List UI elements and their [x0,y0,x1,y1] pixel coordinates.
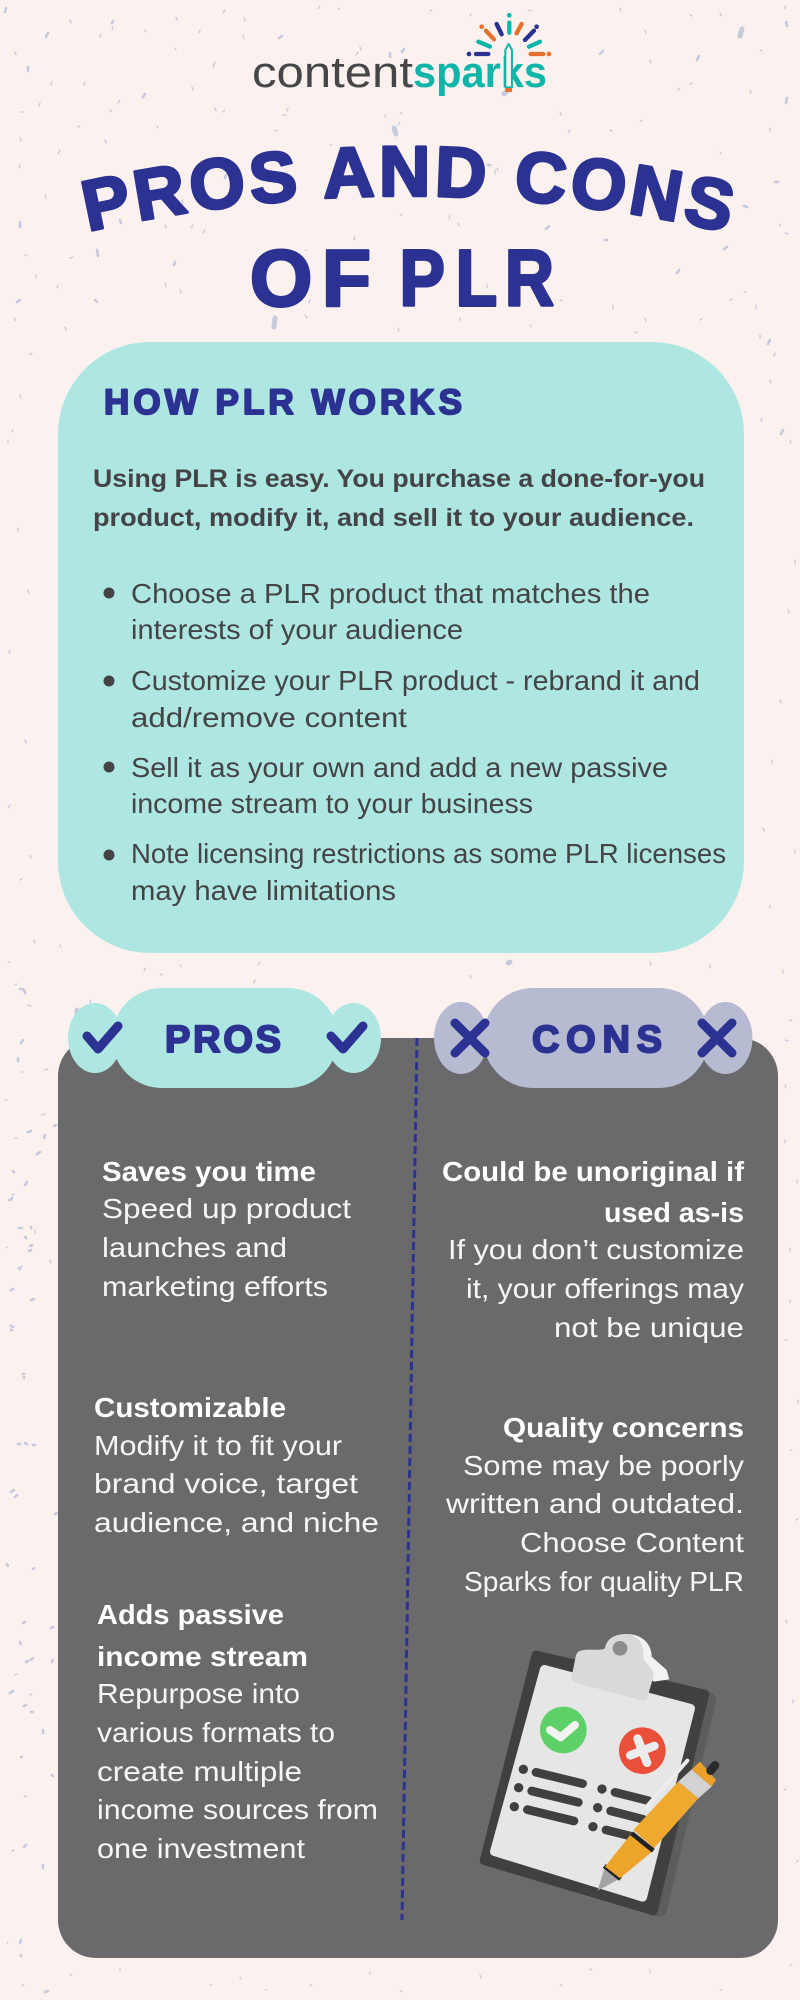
pro: saves you time: launches and [102,1232,287,1263]
con: quality concerns: Quality concerns [503,1412,744,1443]
pro: customizable: Customizable [94,1392,286,1423]
pro: saves you time [102,1156,351,1302]
bullet 3: Sell it as your own and add a new passive [131,752,668,783]
bullet 4: Note licensing restrictions as some PLR licenses [131,838,726,869]
pro: customizable [94,1392,379,1538]
pro: adds passive income stream: Adds passive [97,1599,284,1630]
pro: saves you time: Speed up product [102,1193,351,1224]
cons label: CONS [532,1019,662,1061]
con: could be unoriginal: Could be unoriginal if [442,1156,745,1187]
bullet 2 [104,665,700,733]
bullet 2: Customize your PLR product - rebrand it and [131,665,700,696]
con: could be unoriginal: it, your offerings may [466,1273,744,1304]
pro: saves you time: marketing efforts [102,1271,328,1302]
title line 2 [250,233,554,323]
pro: customizable: audience, and niche [94,1507,379,1538]
title line 2: OF [250,234,371,322]
con: could be unoriginal: used as-is [604,1197,744,1228]
bullet 1 [104,578,650,645]
logo wordmark: content [252,48,413,97]
intro text: product, modify it, and sell it to your audience. [93,504,694,532]
bullet 4 [104,838,726,906]
title line 2: PLR [400,233,554,323]
con: could be unoriginal: not be unique [554,1312,744,1343]
bullet 2: add/remove content [131,702,407,733]
icon: check right [331,1026,363,1049]
heading: HOW PLR WORKS [104,383,462,422]
logo: contentsparks [252,13,551,97]
con: quality concerns: Choose Content [520,1527,744,1558]
bullet 1: interests of your audience [131,614,463,645]
pro: saves you time: Saves you time [102,1156,316,1187]
red cross badge [619,1727,666,1774]
pro: adds passive income stream: various formats to [97,1717,335,1748]
icon: check left [87,1026,118,1049]
badge: cons [434,988,752,1088]
list lines [510,1765,648,1836]
title [81,145,733,323]
con: quality concerns [445,1412,744,1597]
icon: x left [455,1023,485,1053]
con: quality concerns: Some may be poorly [463,1450,744,1481]
pen [598,1761,716,1891]
pro: adds passive income stream: one investment [97,1833,305,1864]
pro: customizable: Modify it to fit your [94,1430,342,1461]
pro: adds passive income stream: create multiple [97,1756,302,1787]
pro: adds passive income stream [97,1599,378,1864]
bullet 3: income stream to your business [131,788,533,819]
panel: how plr works [58,342,744,953]
clip [572,1634,669,1701]
pros label: PROS [165,1019,281,1061]
con: quality concerns: Sparks for quality PLR [464,1566,744,1597]
bullet 3 [104,752,668,819]
icon: x right [702,1023,732,1053]
clipboard board [484,1655,705,1911]
pro: adds passive income stream: income stream [97,1641,308,1672]
con: quality concerns: written and outdated. [445,1488,744,1519]
con: could be unoriginal [442,1156,745,1343]
pro: customizable: brand voice, target [94,1468,358,1499]
icon: pencil and sparks [467,13,551,92]
logo wordmark: sparks [413,48,547,97]
con: could be unoriginal: If you don’t customize [448,1234,744,1265]
pro: adds passive income stream: income sources from [97,1794,378,1825]
bullet 4: may have limitations [131,875,396,906]
panel: pros and cons [58,988,778,1958]
divider [402,1038,417,1920]
bullet list [104,578,726,906]
green check badge [540,1707,587,1753]
paper [494,1669,691,1897]
intro text [93,465,705,532]
clipboard side [648,1691,716,1916]
pro: adds passive income stream: Repurpose into [97,1678,300,1709]
badge: pros [68,988,381,1088]
bullet 1: Choose a PLR product that matches the [131,578,650,609]
title line 1, curved: PROS AND CONS [81,145,733,232]
icon: clipboard and pen [484,1634,716,1916]
intro text: Using PLR is easy. You purchase a done-for-you [93,465,705,493]
